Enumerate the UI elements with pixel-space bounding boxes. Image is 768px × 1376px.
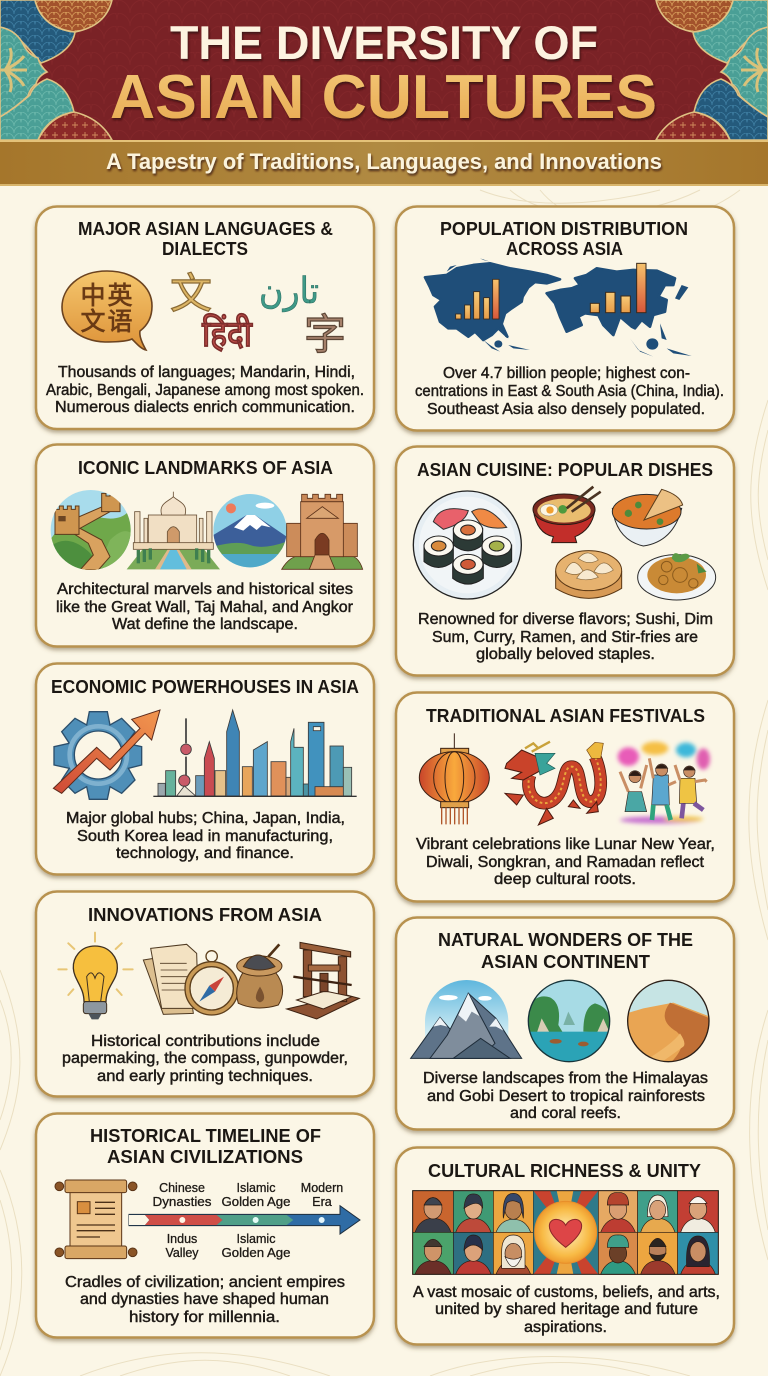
description: and dynasties have shaped human bbox=[80, 1291, 329, 1308]
maroon header background bbox=[0, 0, 768, 141]
heading bbox=[438, 929, 693, 972]
growth arrow bbox=[53, 710, 160, 793]
map left bbox=[425, 263, 560, 340]
card frame bbox=[396, 206, 734, 430]
panel: innovations bbox=[36, 892, 374, 1096]
Mount Fuji bbox=[213, 493, 287, 569]
heading: CULTURAL RICHNESS & UNITY bbox=[428, 1160, 702, 1181]
stir-fry plate bbox=[638, 553, 716, 600]
gear bbox=[54, 712, 142, 799]
description bbox=[56, 581, 353, 633]
timeline labels: Dynasties bbox=[152, 1195, 212, 1209]
heading bbox=[90, 1125, 321, 1167]
description: Thousands of languages; Mandarin, Hindi, bbox=[58, 364, 355, 381]
description bbox=[423, 1070, 708, 1122]
panel: historical timeline bbox=[36, 1114, 374, 1338]
title bbox=[110, 16, 657, 132]
glyph: wen: 文 bbox=[170, 270, 212, 317]
map left islands bbox=[447, 258, 530, 352]
card frame bbox=[396, 1148, 734, 1344]
curry bowl bbox=[612, 489, 683, 546]
icon: landmarks row bbox=[50, 490, 363, 570]
description: Arabic, Bengali, Japanese among most spoken. bbox=[46, 382, 364, 399]
description: and early printing techniques. bbox=[97, 1068, 313, 1085]
map right bbox=[547, 268, 675, 335]
heading: MAJOR ASIAN LANGUAGES & bbox=[78, 218, 333, 239]
subtitle band bbox=[0, 140, 768, 186]
card frame bbox=[396, 918, 734, 1130]
description: papermaking, the compass, gunpowder, bbox=[62, 1050, 348, 1067]
gunpowder sack bbox=[237, 944, 283, 1008]
description bbox=[413, 1284, 720, 1336]
description: Renowned for diverse flavors; Sushi, Dim bbox=[418, 611, 713, 628]
panel: Asian cuisine bbox=[396, 446, 734, 676]
title: THE DIVERSITY OF bbox=[170, 16, 598, 69]
description: and coral reefs. bbox=[510, 1105, 621, 1122]
ramen bowl bbox=[533, 487, 601, 543]
heading: HISTORICAL TIMELINE OF bbox=[90, 1125, 321, 1146]
header banner bbox=[0, 0, 768, 186]
card frame bbox=[36, 1114, 374, 1338]
top row portraits right bbox=[598, 1191, 718, 1232]
timeline labels: Golden Age bbox=[222, 1195, 291, 1209]
description bbox=[418, 611, 713, 663]
speech bubble bbox=[62, 271, 152, 350]
description bbox=[416, 836, 715, 888]
heading: ICONIC LANDMARKS OF ASIA bbox=[78, 457, 333, 478]
timeline labels bbox=[152, 1181, 343, 1260]
icon: inventions bbox=[58, 933, 359, 1019]
skyline ground bbox=[153, 796, 357, 797]
description bbox=[66, 810, 345, 862]
sushi plate bbox=[413, 491, 521, 599]
heading: ASIAN CIVILIZATIONS bbox=[107, 1146, 303, 1167]
glyph: zi: 字 bbox=[304, 311, 346, 358]
speech bubble: 语 bbox=[107, 308, 133, 336]
Taj Mahal bbox=[127, 492, 220, 569]
subtitle band: A Tapestry of Traditions, Languages, and Innovations bbox=[106, 149, 662, 174]
speech bubble: 英 bbox=[107, 282, 133, 310]
description: Architectural marvels and historical sites bbox=[57, 581, 353, 598]
description: aspirations. bbox=[524, 1319, 607, 1336]
card frame bbox=[36, 892, 374, 1096]
panel: economic powerhouses bbox=[36, 664, 374, 874]
bottom row portraits right bbox=[598, 1232, 718, 1274]
description: united by shared heritage and future bbox=[435, 1301, 698, 1318]
title: ASIAN CULTURES bbox=[110, 63, 657, 132]
heading bbox=[440, 218, 688, 259]
panel: natural wonders bbox=[396, 918, 734, 1130]
description: Diwali, Songkran, and Ramadan reflect bbox=[426, 854, 705, 871]
left corner ornaments bbox=[0, 0, 112, 140]
heading: ACROSS ASIA bbox=[506, 238, 623, 259]
icon: population maps with bars bbox=[425, 258, 692, 357]
lantern bbox=[419, 733, 489, 824]
dim sum steamer bbox=[556, 551, 622, 598]
Himalayas bbox=[411, 980, 522, 1058]
description: Vibrant celebrations like Lunar New Year, bbox=[416, 836, 715, 853]
printing press bbox=[287, 942, 359, 1019]
icon: language scripts bbox=[62, 270, 346, 358]
description: Wat define the landscape. bbox=[112, 616, 298, 633]
colour-festival dancers bbox=[618, 742, 710, 824]
icon: landscapes bbox=[411, 980, 710, 1063]
description: technology, and finance. bbox=[116, 845, 294, 862]
description: Diverse landscapes from the Himalayas bbox=[423, 1070, 708, 1087]
description bbox=[65, 1274, 345, 1326]
description: Sum, Curry, Ramen, and Stir-fries are bbox=[432, 629, 698, 646]
description: Cradles of civilization; ancient empires bbox=[65, 1274, 345, 1291]
timeline labels: Indus bbox=[167, 1232, 197, 1246]
bars left bbox=[456, 279, 499, 319]
description: Major global hubs; China, Japan, India, bbox=[66, 810, 345, 827]
bars right bbox=[590, 263, 646, 313]
heading bbox=[78, 218, 333, 259]
icon: gear, arrow and skyline bbox=[53, 710, 357, 799]
card frame bbox=[396, 446, 734, 676]
description bbox=[415, 365, 724, 418]
heading: INNOVATIONS FROM ASIA bbox=[88, 904, 322, 925]
card frame bbox=[396, 692, 734, 902]
panel: traditional festivals bbox=[396, 692, 734, 902]
heading: TRADITIONAL ASIAN FESTIVALS bbox=[426, 705, 705, 726]
description: deep cultural roots. bbox=[494, 871, 636, 888]
timeline labels: Golden Age bbox=[222, 1246, 291, 1260]
icon: people mosaic bbox=[413, 1191, 718, 1274]
description: Numerous dialects enrich communication. bbox=[55, 399, 355, 416]
paper sheets bbox=[143, 944, 198, 1014]
timeline labels: Modern bbox=[301, 1181, 343, 1195]
description: Historical contributions include bbox=[91, 1033, 320, 1050]
description: Over 4.7 billion people; highest con- bbox=[443, 365, 690, 382]
heading: POPULATION DISTRIBUTION bbox=[440, 218, 688, 239]
description: centrations in East & South Asia (China, India). bbox=[415, 383, 724, 400]
top row portraits left bbox=[413, 1191, 533, 1232]
Angkor Wat bbox=[282, 494, 363, 569]
description: A vast mosaic of customs, beliefs, and arts, bbox=[413, 1284, 720, 1301]
icon: scroll bbox=[55, 1180, 137, 1259]
timeline labels: Islamic bbox=[237, 1181, 275, 1195]
description: South Korea lead in manufacturing, bbox=[77, 828, 333, 845]
timeline labels: Chinese bbox=[159, 1181, 205, 1195]
card frame bbox=[36, 664, 374, 874]
description: like the Great Wall, Taj Mahal, and Angkor bbox=[56, 599, 353, 616]
central heart medallion bbox=[533, 1191, 598, 1274]
icon: festival scenes bbox=[419, 733, 710, 825]
description: Southeast Asia also densely populated. bbox=[427, 401, 705, 418]
dragon bbox=[505, 742, 603, 825]
right corner ornaments bbox=[656, 0, 768, 140]
timeline arrow bbox=[129, 1206, 360, 1234]
timeline labels: Valley bbox=[165, 1246, 199, 1260]
mosaic frame bbox=[413, 1191, 718, 1274]
timeline labels: Islamic bbox=[237, 1232, 275, 1246]
description: globally beloved staples. bbox=[476, 646, 655, 663]
heading: ASIAN CONTINENT bbox=[481, 951, 651, 972]
panel: cultural richness bbox=[396, 1148, 734, 1344]
light bulb bbox=[58, 933, 133, 1019]
skyline bbox=[158, 710, 352, 796]
Great Wall bbox=[50, 490, 132, 570]
Gobi Desert bbox=[627, 980, 710, 1063]
icon: dishes bbox=[413, 487, 716, 600]
description bbox=[46, 364, 364, 416]
panel: major Asian languages bbox=[36, 206, 374, 429]
panel: population distribution bbox=[396, 206, 734, 430]
glyph: Arabic script: تارن bbox=[259, 271, 319, 312]
Taj garden trees bbox=[137, 548, 210, 563]
description: history for millennia. bbox=[129, 1309, 280, 1326]
glyph: Hindi script: हिंदी bbox=[201, 313, 253, 355]
compass bbox=[185, 951, 238, 1015]
heading: DIALECTS bbox=[162, 238, 248, 259]
heading: ASIAN CUISINE: POPULAR DISHES bbox=[417, 459, 713, 480]
bottom row portraits left bbox=[413, 1232, 533, 1274]
card frame bbox=[36, 206, 374, 429]
panel: iconic landmarks bbox=[36, 444, 374, 646]
Ha Long Bay bbox=[528, 980, 610, 1063]
description: and Gobi Desert to tropical rainforests bbox=[427, 1088, 705, 1105]
speech bubble: 文 bbox=[80, 308, 106, 336]
description bbox=[62, 1033, 348, 1085]
heading: ECONOMIC POWERHOUSES IN ASIA bbox=[51, 676, 359, 697]
speech bubble: 中 bbox=[80, 282, 106, 310]
map right islands bbox=[630, 285, 692, 357]
heading: NATURAL WONDERS OF THE bbox=[438, 929, 693, 950]
timeline labels: Era bbox=[312, 1195, 332, 1209]
card frame bbox=[36, 444, 374, 646]
